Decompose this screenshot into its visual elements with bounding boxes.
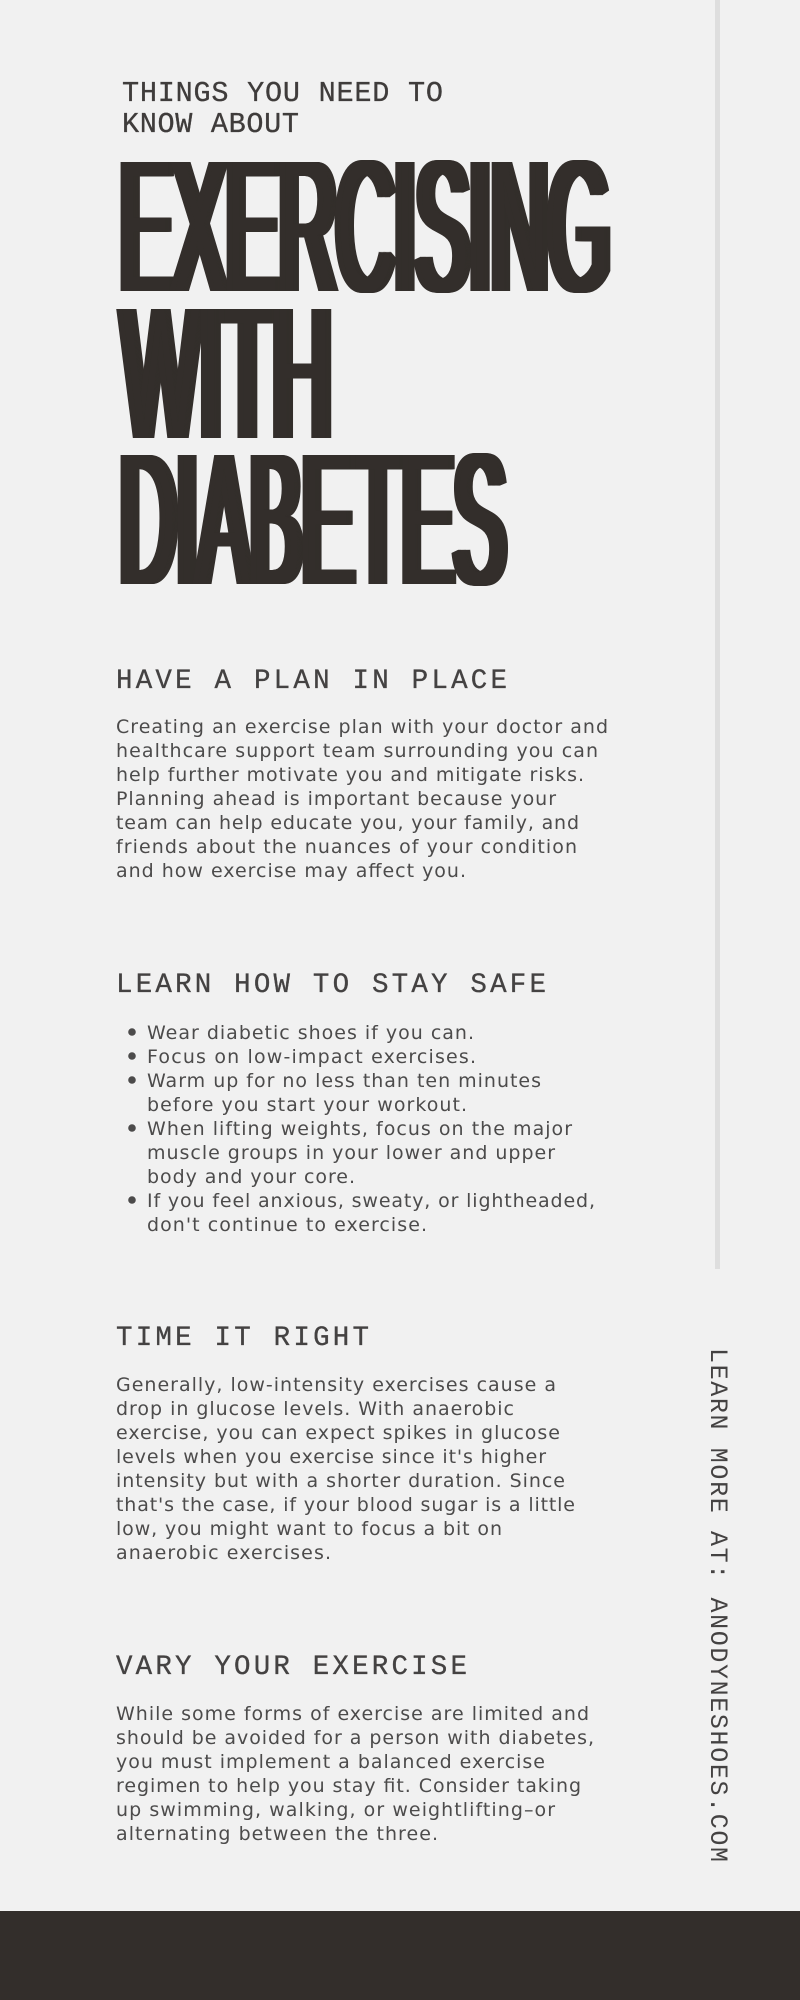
paragraph: vary your exercise: you must implement a balanced exercise <box>116 1751 545 1773</box>
paragraph: time it right <box>116 1374 575 1564</box>
bullet list: Warm up for no less than ten minutes <box>147 1070 541 1092</box>
paragraph: have a plan: Creating an exercise plan with your doctor and <box>116 716 608 738</box>
paragraph: have a plan: team can help educate you, your family, and <box>116 812 579 834</box>
bullet list: Wear diabetic shoes if you can. <box>147 1022 474 1044</box>
heading: have a plan: HAVE A PLAN IN PLACE <box>116 666 507 697</box>
paragraph: time it right: exercise, you can expect spikes in glucose <box>116 1422 560 1444</box>
paragraph: time it right: intensity but with a shorter duration. Since <box>116 1470 565 1492</box>
bullet list: If you feel anxious, sweaty, or lightheaded, <box>147 1190 595 1212</box>
main title: WITH <box>122 268 331 478</box>
intro heading: KNOW ABOUT <box>122 108 299 141</box>
paragraph: have a plan: healthcare support team surrounding you can <box>116 740 598 762</box>
paragraph: vary your exercise: regimen to help you stay fit. Consider taking <box>116 1775 581 1797</box>
paragraph: vary your exercise: up swimming, walking, or weightlifting–or <box>116 1799 555 1821</box>
paragraph: time it right: that's the case, if your blood sugar is a little <box>116 1494 575 1516</box>
paragraph: time it right: drop in glucose levels. With anaerobic <box>116 1398 514 1420</box>
intro heading <box>122 77 443 141</box>
footer band <box>0 1911 800 2000</box>
heading: vary your exercise: VARY YOUR EXERCISE <box>116 1652 467 1683</box>
paragraph: have a plan: and how exercise may affect you. <box>116 860 466 882</box>
paragraph: have a plan: Planning ahead is important because your <box>116 788 556 810</box>
bullet list: don't continue to exercise. <box>147 1214 427 1236</box>
main title <box>116 121 610 624</box>
section: have a plan in place <box>116 666 608 882</box>
paragraph: have a plan: help further motivate you and mitigate risks. <box>116 764 584 786</box>
paragraph: have a plan <box>116 716 608 882</box>
heading: stay safe: LEARN HOW TO STAY SAFE <box>116 970 546 1001</box>
intro heading: THINGS YOU NEED TO <box>122 77 443 110</box>
bullet list: muscle groups in your lower and upper <box>147 1142 555 1164</box>
paragraph: time it right: Generally, low-intensity exercises cause a <box>116 1374 556 1396</box>
section: learn how to stay safe <box>116 970 595 1236</box>
paragraph: vary your exercise <box>116 1703 594 1845</box>
bullet list <box>128 1022 595 1236</box>
bullet list: When lifting weights, focus on the major <box>147 1118 572 1140</box>
paragraph: vary your exercise: alternating between the three. <box>116 1823 438 1845</box>
bullet list: body and your core. <box>147 1166 355 1188</box>
paragraph: have a plan: friends about the nuances of your condition <box>116 836 577 858</box>
paragraph: time it right: low, you might want to focus a bit on <box>116 1518 502 1540</box>
vertical rule <box>715 0 720 1269</box>
paragraph: time it right: anaerobic exercises. <box>116 1542 331 1564</box>
paragraph: vary your exercise: should be avoided for a person with diabetes, <box>116 1727 594 1749</box>
bullet list: before you start your workout. <box>147 1094 467 1116</box>
paragraph: vary your exercise: While some forms of exercise are limited and <box>116 1703 589 1725</box>
paragraph: time it right: levels when you exercise since it's higher <box>116 1446 546 1468</box>
vertical side text: LEARN MORE AT: ANODYNESHOES.COM <box>703 1348 732 1862</box>
heading: time it right: TIME IT RIGHT <box>116 1323 369 1354</box>
bullet list: Focus on low-impact exercises. <box>147 1046 476 1068</box>
section: vary your exercise <box>116 1652 594 1845</box>
main title: EXERCISING <box>120 121 610 331</box>
main title: DIABETES <box>120 414 506 624</box>
section: time it right <box>116 1323 575 1564</box>
